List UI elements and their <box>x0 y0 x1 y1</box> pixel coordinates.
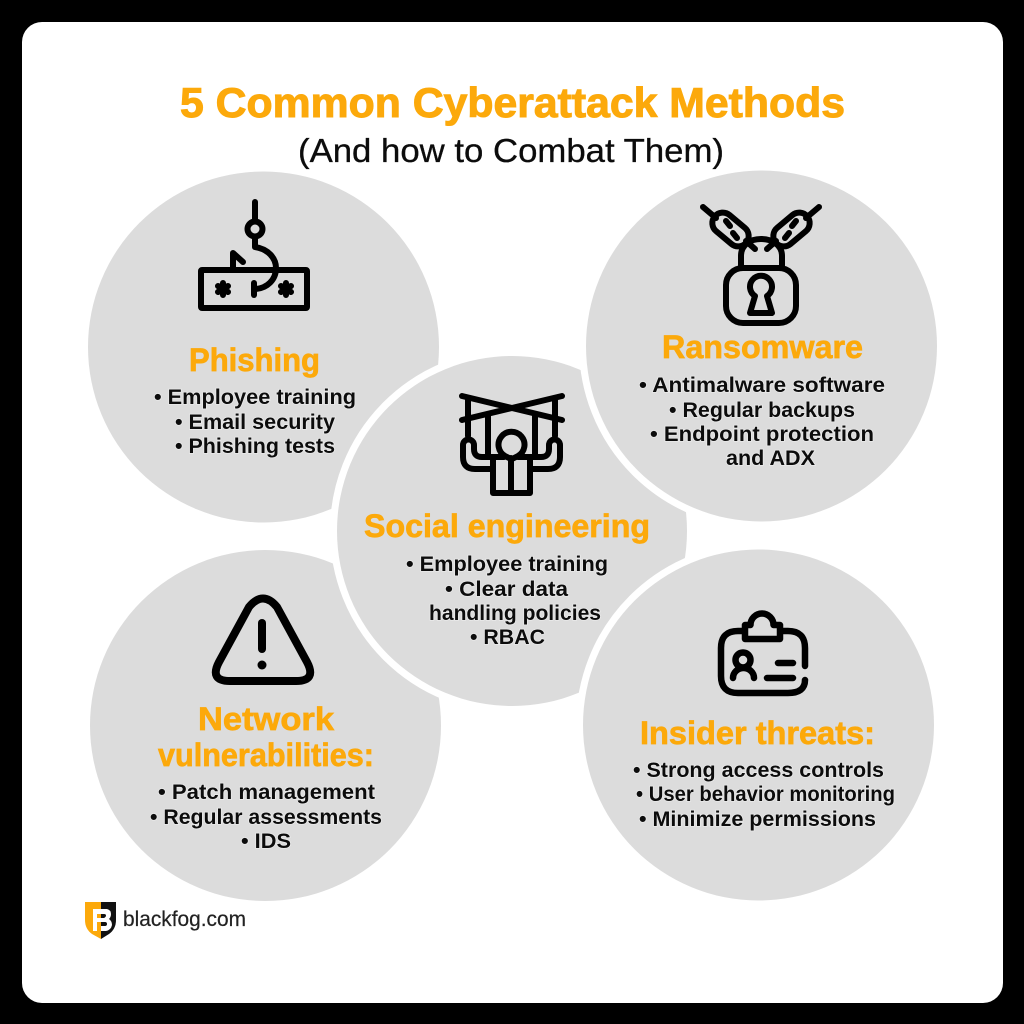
list: social engineering defenses: • RBAC <box>470 626 545 649</box>
panel: network vulnerabilities <box>90 550 441 901</box>
heading: Ransomware: Ransomware <box>662 329 863 365</box>
list: insider defenses: • Minimize permissions <box>639 808 876 831</box>
list: network defenses <box>150 781 382 853</box>
icon: warning triangle <box>216 598 310 681</box>
list: ransomware defenses: • Regular backups <box>669 399 855 422</box>
list: social engineering defenses: handling policies <box>429 602 601 625</box>
logo text: blackfog.com <box>123 908 246 931</box>
icon: fish hook on password <box>201 202 307 308</box>
list: ransomware defenses: and ADX <box>726 447 815 470</box>
heading: Insider threats: Insider threats: <box>640 715 875 751</box>
list: ransomware defenses: • Endpoint protection <box>650 423 874 446</box>
list: ransomware defenses: • Antimalware software <box>639 374 885 397</box>
panel: phishing <box>88 172 439 522</box>
panel: ransomware <box>586 170 937 522</box>
title: 5 Common Cyberattack Methods <box>180 79 845 126</box>
icon: puppet on strings <box>462 396 562 493</box>
subtitle: (And how to Combat Them) <box>298 132 724 169</box>
list: ransomware defenses <box>639 374 885 470</box>
icon: chained padlock <box>703 207 819 323</box>
list: insider defenses <box>633 759 895 831</box>
heading: Network vulnerabilities <box>158 701 374 773</box>
list: network defenses: • Patch management <box>158 781 375 804</box>
list: social engineering defenses <box>406 553 608 649</box>
list: network defenses: • Regular assessments <box>150 806 382 829</box>
list: social engineering defenses: • Employee training <box>406 553 608 576</box>
panel: insider threats <box>583 550 934 900</box>
list: network defenses: • IDS <box>241 830 291 853</box>
list: phishing defenses: • Email security <box>175 411 335 434</box>
heading: Network vulnerabilities: Network <box>198 701 334 737</box>
heading: Phishing: Phishing <box>189 342 320 378</box>
icon: shield <box>85 902 116 939</box>
heading: Social engineering: Social engineering <box>364 508 650 544</box>
heading: Network vulnerabilities: vulnerabilities: <box>158 737 374 773</box>
list: phishing defenses <box>154 386 356 458</box>
list: insider defenses: • User behavior monitoring <box>636 783 895 806</box>
list: phishing defenses: • Employee training <box>154 386 356 409</box>
list: phishing defenses: • Phishing tests <box>175 435 335 458</box>
logo: blackfog <box>85 902 246 939</box>
list: insider defenses: • Strong access controls <box>633 759 884 782</box>
list: social engineering defenses: • Clear data <box>445 578 568 601</box>
icon: ID badge <box>721 614 805 693</box>
panel: social engineering <box>337 356 687 706</box>
